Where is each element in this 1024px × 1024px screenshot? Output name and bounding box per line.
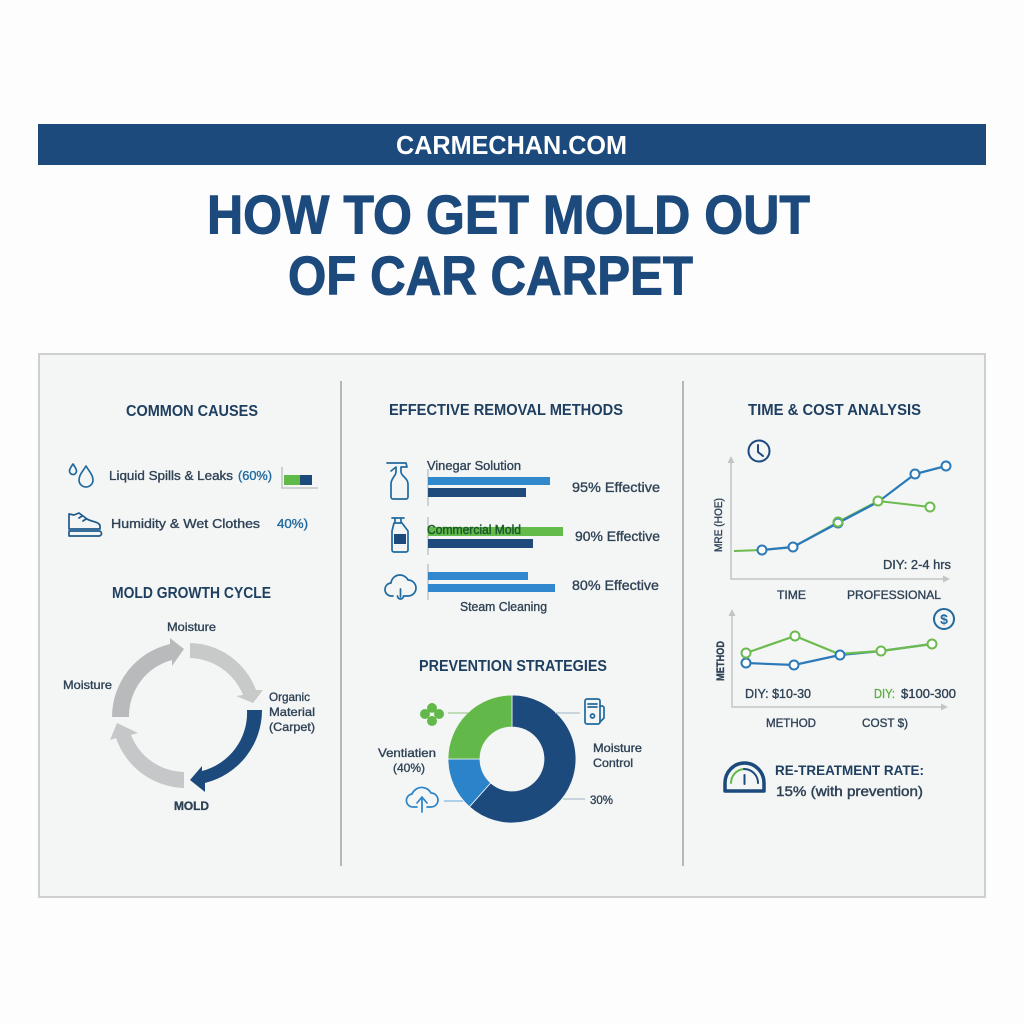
cause: humidity: 40%) [277, 516, 308, 531]
arrow: organic material to mold [190, 710, 262, 792]
title [207, 184, 810, 306]
method: commercial mold: Commercial Mold [427, 522, 521, 537]
heading: effective removal methods: EFFECTIVE REMOVAL METHODS [389, 402, 623, 419]
arrow: mold to moisture [110, 723, 184, 788]
icon: water drops [70, 464, 93, 487]
time line chart: TIME [777, 588, 806, 602]
time line chart: DIY: 2-4 hrs [883, 557, 951, 572]
donut labels: 30% [590, 793, 613, 807]
method: commercial mold: 90% Effective [575, 528, 660, 544]
cost line chart: METHOD [715, 641, 727, 681]
cycle labels [63, 620, 315, 813]
cost line chart [715, 609, 956, 730]
heading: prevention strategies: PREVENTION STRATEGIES [419, 658, 607, 675]
icon: dehumidifier [585, 699, 604, 724]
arrow: moisture to moisture [112, 638, 184, 717]
donut chart [448, 695, 576, 823]
cause: liquid spills: (60%) [238, 468, 272, 483]
cycle labels: (Carpet) [269, 720, 315, 734]
cycle labels: Material [269, 705, 315, 719]
heading: common causes: COMMON CAUSES [126, 403, 258, 420]
donut labels: Moisture [593, 741, 642, 755]
heading: time and cost analysis: TIME & COST ANALYSIS [748, 402, 921, 419]
donut labels: (40%) [393, 761, 425, 775]
title: OF CAR CARPET [288, 244, 693, 306]
cycle labels: MOLD [174, 799, 209, 813]
cost line chart: COST $) [862, 716, 908, 730]
method: steam cleaning [428, 564, 659, 614]
heading: mold growth cycle: MOLD GROWTH CYCLE [112, 585, 271, 602]
cause: humidity: Humidity & Wet Clothes [111, 516, 261, 531]
donut labels: Control [593, 756, 633, 770]
icon: spray bottle [387, 463, 408, 499]
icon: dollar [934, 609, 954, 629]
cycle diagram [110, 638, 263, 792]
method: vinegar solution [427, 458, 660, 506]
method: vinegar solution: 95% Effective [572, 479, 660, 495]
donut labels: Ventiatien [378, 746, 436, 760]
arrow: moisture to organic material [190, 643, 263, 703]
time line chart [713, 456, 951, 602]
icon: dollar: $ [940, 611, 948, 627]
method: vinegar solution: Vinegar Solution [427, 458, 521, 473]
cycle labels: Moisture [167, 620, 216, 634]
title: HOW TO GET MOLD OUT [207, 184, 810, 246]
icon: fan clover [420, 703, 444, 726]
icon: commercial bottle [392, 518, 408, 552]
cost line chart: DIY: $10-30 [745, 686, 811, 701]
cause: liquid spills: Liquid Spills & Leaks [109, 468, 234, 483]
cost line chart: DIY: [874, 686, 895, 701]
cost line chart: $100-300 [901, 686, 956, 701]
icon: upload cloud [406, 787, 438, 812]
icon: shoe [69, 513, 102, 536]
cause: humidity [111, 516, 308, 531]
method: commercial mold [427, 517, 660, 555]
time line chart: MRE (HOE) [713, 498, 725, 552]
time line chart: PROFESSIONAL [847, 588, 941, 602]
donut labels [378, 741, 642, 807]
re-treatment rate text: 15% (with prevention) [776, 783, 923, 799]
cycle labels: Organic [269, 690, 310, 704]
icon: clock [748, 440, 770, 462]
method: steam cleaning: 80% Effective [572, 577, 659, 593]
icon: gauge [725, 763, 764, 791]
main panel [39, 354, 985, 897]
cycle labels: Moisture [63, 678, 112, 692]
header banner: CARMECHAN.COM [396, 130, 627, 160]
re-treatment rate text: RE-TREATMENT RATE: [775, 762, 924, 778]
method: steam cleaning: Steam Cleaning [460, 599, 547, 614]
leader lines [444, 713, 585, 801]
header banner [38, 124, 986, 165]
mini bar chart [282, 467, 318, 488]
cost line chart: METHOD [766, 716, 816, 730]
re-treatment rate text [775, 762, 924, 799]
icon: steam cloud [385, 575, 416, 599]
